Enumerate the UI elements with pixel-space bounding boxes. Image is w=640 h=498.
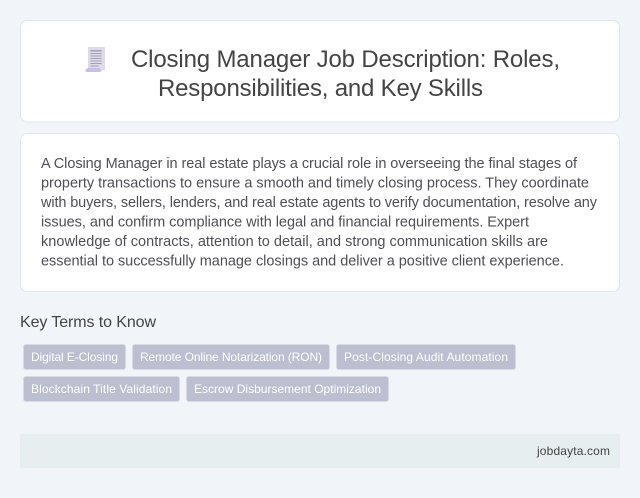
title: Closing Manager Job Description: Roles, (131, 46, 560, 73)
tag: Post-Closing Audit Automation (336, 344, 516, 370)
title (131, 46, 560, 102)
panel: description card (20, 134, 620, 292)
tag: Escrow Disbursement Optimization: Escrow Disbursement Optimization (194, 382, 381, 396)
icon: document scroll (85, 47, 105, 72)
description text: A Closing Manager in real estate plays a crucial role in overseeing the final stages of (41, 156, 578, 172)
tag: Blockchain Title Validation: Blockchain Title Validation (31, 382, 172, 396)
title: Responsibilities, and Key Skills (158, 75, 483, 102)
footer source text: jobdayta.com (536, 444, 610, 458)
description text: knowledge of contracts, attention to detail, and strong communication skills are (41, 234, 548, 250)
description text: property transactions to ensure a smooth and timely closing process. They coordinate (41, 176, 589, 192)
tag: Digital E-Closing (24, 344, 126, 370)
tag: Escrow Disbursement Optimization (186, 376, 388, 402)
tag: Post-Closing Audit Automation: Post-Closing Audit Automation (344, 350, 508, 364)
footer bar (20, 434, 620, 468)
tag: Digital E-Closing: Digital E-Closing (31, 350, 118, 364)
tag: Blockchain Title Validation (24, 376, 180, 402)
description text: with buyers, sellers, lenders, and real estate agents to verify documentation, resolve any (40, 195, 598, 211)
description text (40, 156, 598, 270)
panel: title card (20, 20, 620, 122)
tag: Remote Online Notarization (132, 344, 330, 370)
tag: Remote Online Notarization: Remote Online Notarization (RON) (140, 350, 322, 364)
heading: key terms: Key Terms to Know (20, 314, 156, 331)
description text: essential to successfully manage closings and deliver a positive client experience. (41, 254, 564, 270)
description text: issues, and confirm compliance with legal and financial requirements. Expert (41, 214, 529, 230)
